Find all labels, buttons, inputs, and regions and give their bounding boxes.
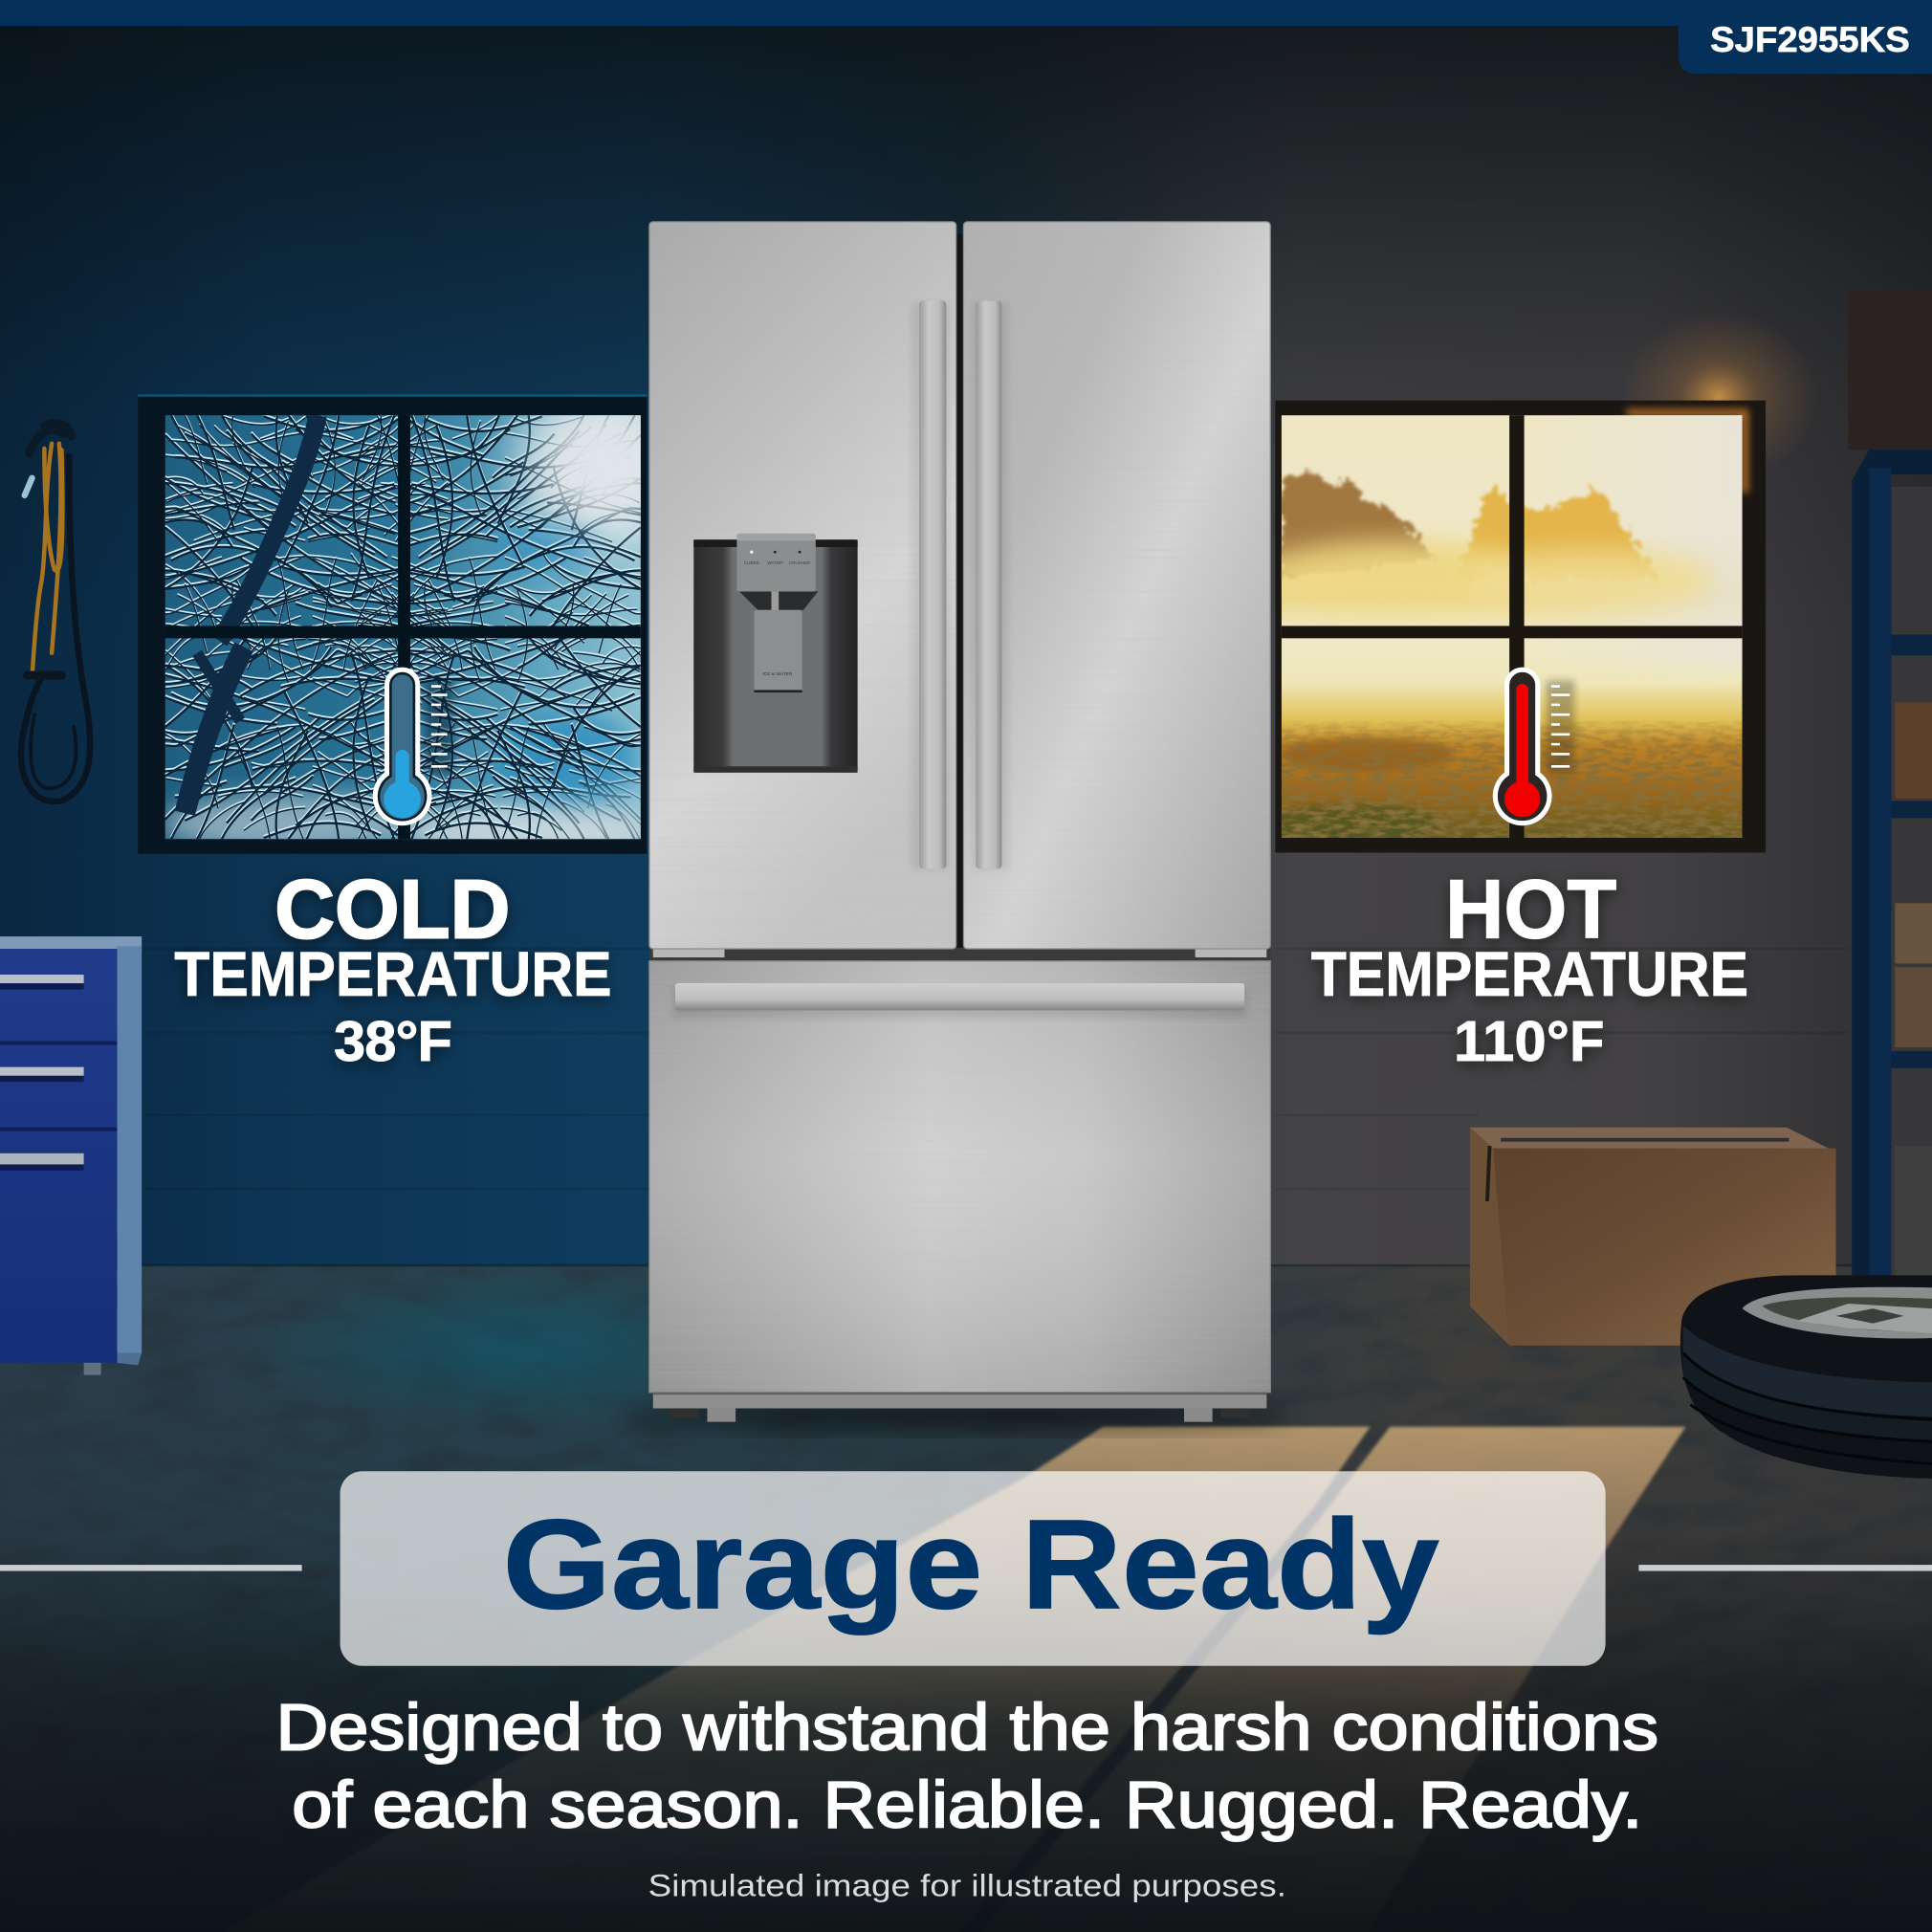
heading: hot temperature [1311,862,1748,1073]
water and ice dispenser [693,534,858,773]
dispenser control panel: WATER [767,560,783,565]
left door handle [911,300,949,870]
winter branches scene [165,415,641,840]
heading: hot temperature: HOT [1445,862,1616,955]
icon: hot thermometer [1495,670,1574,823]
sunlight patch on floor [222,1427,1685,1932]
heading: cold temperature: TEMPERATURE [174,939,612,1009]
window mullions [1282,415,1743,838]
title panel: Garage Ready [340,1471,1606,1666]
heading: cold temperature [174,862,612,1073]
drawer handle [672,983,1247,1018]
body text: of each season. Reliable. Rugged. Ready. [292,1768,1642,1841]
icon: cold thermometer [375,670,453,823]
panel: cold window [138,394,647,854]
panel: blue tool cabinet [0,936,142,1375]
garage back wall [0,0,1932,1269]
panel: tire [1680,1275,1932,1479]
dispenser control panel: CUBED [744,560,760,565]
shadow under refrigerator [627,1399,1292,1429]
dispenser lever: ICE & WATER [762,671,793,677]
bottom freezer drawer [649,961,1270,1393]
panel: storage shelf and boxes [1848,292,1932,1275]
heading: cold temperature: COLD [274,862,510,955]
right door [963,222,1270,949]
left door [649,222,956,949]
panel: hot window [1257,311,1817,852]
title panel: Garage Ready: Garage Ready [503,1494,1439,1636]
panel: cardboard box [1470,1128,1836,1346]
right door handle [974,300,1008,870]
model tag [1679,0,1932,74]
sunny field scene [1282,415,1743,838]
fridge body gap [956,234,963,955]
side rule right [1638,1565,1932,1571]
side rule left [0,1565,302,1571]
heading: hot temperature: 110°F [1454,1009,1604,1073]
window mullions [165,415,641,839]
heading: cold temperature: 38°F [334,1009,452,1073]
top header bar [0,0,1932,26]
dispenser control panel: CRUSHED [789,560,811,565]
icon: hanging cord [21,424,90,801]
fridge base and feet [653,1393,1266,1422]
body text [276,1691,1658,1841]
garage floor [0,1264,1932,1932]
heading: hot temperature: TEMPERATURE [1311,939,1748,1009]
disclaimer: Simulated image for illustrated purposes. [648,1869,1286,1903]
model tag: SJF2955KS [1710,19,1910,59]
panel: refrigerator [649,222,1270,1422]
dispenser lever [754,610,802,692]
body text: Designed to withstand the harsh conditions [276,1691,1658,1764]
dispenser control panel [736,534,816,591]
